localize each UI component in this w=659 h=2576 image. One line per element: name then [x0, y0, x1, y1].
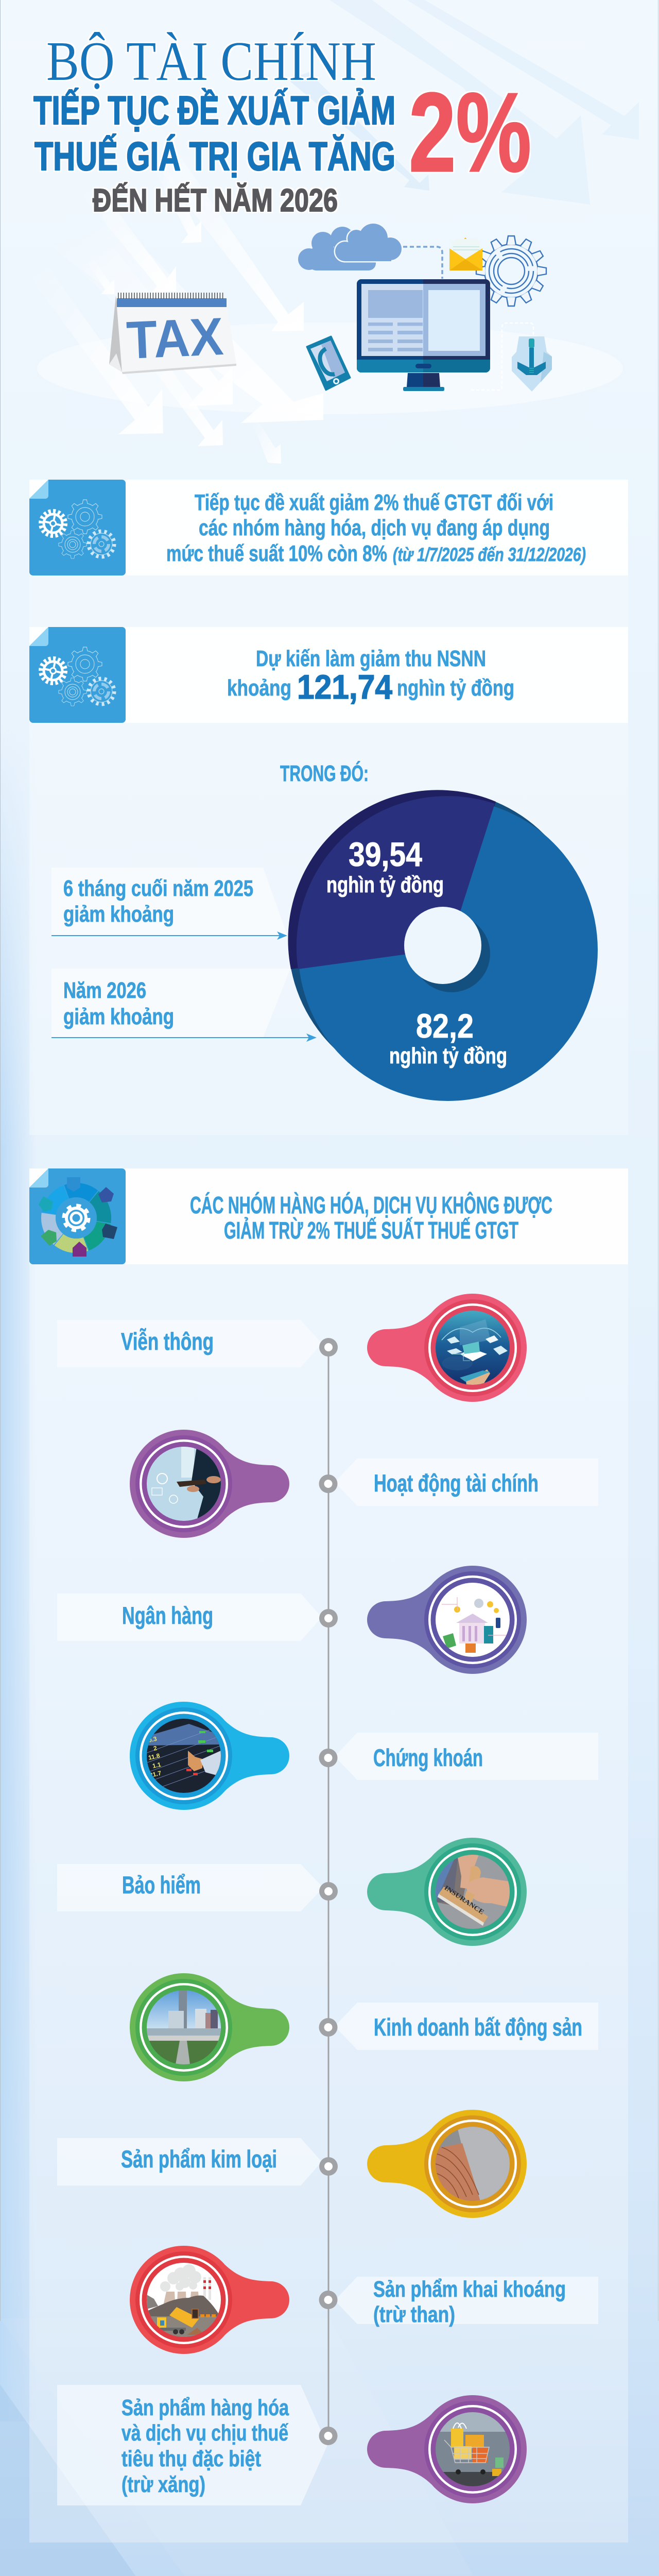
- pin: finance: [130, 1430, 289, 1538]
- item: Sản phẩm hàng hóa và dịch vụ chịu thuế tiêu thụ đặc biệt: Sản phẩm hàng hóa: [122, 2395, 289, 2420]
- title line: đến hết năm 2026: ĐẾN HẾT NĂM 2026: [93, 183, 338, 218]
- text: proposal: mức thuế suất 10% còn 8%: [166, 541, 387, 566]
- value: 82,2: nghìn tỷ đồng: [389, 1043, 507, 1069]
- item: Viễn thông: Viễn thông: [121, 1328, 214, 1355]
- item: Chứng khoán: [130, 1702, 598, 1810]
- text: proposal: Tiếp tục đề xuất giảm 2% thuế GTGT đối với: [195, 490, 553, 515]
- item: Kinh doanh bất động sản: Kinh doanh bất động sản: [374, 2013, 582, 2041]
- donut chart: [288, 790, 598, 1101]
- icon: monitor: [357, 279, 490, 391]
- label: 6 tháng cuối năm 2025: [51, 868, 287, 940]
- icon: mouse: [471, 323, 552, 392]
- pin: metals: [367, 2110, 527, 2218]
- panel: revenue estimate: [29, 627, 628, 723]
- icon: service wheel: [29, 1168, 126, 1264]
- item: Bảo hiểm: [57, 1838, 527, 1946]
- value: 39,54: [326, 835, 444, 897]
- pin: mining: [130, 2246, 289, 2354]
- connector: dashed line: [403, 247, 442, 279]
- icon: gear: [476, 236, 546, 306]
- pin: insurance: [367, 1838, 527, 1946]
- pin: telecom: [367, 1294, 527, 1402]
- pin: securities: 1.1: [152, 1761, 162, 1770]
- item: Hoạt động tài chính: Hoạt động tài chính: [374, 1469, 539, 1497]
- heading text: GIẢM TRỪ 2% THUẾ SUẤT THUẾ GTGT: [224, 1217, 518, 1244]
- item: Kinh doanh bất động sản: [130, 1973, 598, 2081]
- label: 6 tháng cuối năm 2025: 6 tháng cuối năm 2025: [63, 876, 253, 901]
- pin: banking: [367, 1566, 527, 1674]
- text: proposal: [166, 490, 586, 566]
- illustration: tax calendar: [109, 296, 236, 374]
- icon: clouds: [298, 224, 402, 270]
- icon: phone: [307, 336, 350, 390]
- panel: estimate background: [29, 575, 628, 1135]
- text: revenue estimate: nghìn tỷ đồng: [397, 675, 514, 701]
- text: proposal: các nhóm hàng hóa, dịch vụ đang áp dụng: [199, 515, 550, 540]
- heading: trong đó: TRONG ĐÓ:: [280, 760, 369, 786]
- illustration: technology devices: [298, 224, 552, 392]
- pin: securities: [130, 1702, 289, 1810]
- item: Sản phẩm hàng hóa và dịch vụ chịu thuế tiêu thụ đặc biệt: [57, 2385, 527, 2505]
- title line: Bộ Tài chính: BỘ TÀI CHÍNH: [46, 31, 376, 92]
- heading text: [190, 1192, 552, 1244]
- item: Sản phẩm kim loại: [57, 2110, 527, 2218]
- item: Viễn thông: [57, 1294, 527, 1402]
- item: Sản phẩm khai khoáng: (trừ than): [373, 2302, 455, 2327]
- timeline line: [327, 1347, 330, 2436]
- value: 39,54: 39,54: [349, 835, 422, 873]
- item: Bảo hiểm: Bảo hiểm: [122, 1871, 201, 1899]
- item: Sản phẩm kim loại: Sản phẩm kim loại: [121, 2145, 277, 2173]
- pin: securities: 11.8: [148, 1752, 161, 1761]
- title: [33, 31, 531, 218]
- slice: 39,54: [297, 796, 495, 969]
- value: 39,54: nghìn tỷ đồng: [326, 872, 444, 897]
- icon: gears folder: [29, 480, 126, 575]
- value: 82,2: 82,2: [416, 1007, 474, 1045]
- text: revenue estimate: [227, 646, 514, 706]
- item: Sản phẩm khai khoáng: [130, 2246, 598, 2354]
- label: 6 tháng cuối năm 2025: giảm khoảng: [63, 902, 174, 927]
- item: Ngân hàng: [57, 1566, 527, 1674]
- item: Sản phẩm hàng hóa và dịch vụ chịu thuế tiêu thụ đặc biệt: tiêu thụ đặc biệt: [122, 2446, 261, 2471]
- item: Ngân hàng: Ngân hàng: [122, 1602, 213, 1629]
- pin: special goods: [367, 2395, 527, 2503]
- label: năm 2026: Năm 2026: [63, 978, 146, 1003]
- icon: envelope: [449, 238, 482, 270]
- pin: real estate: [130, 1973, 289, 2081]
- item: Sản phẩm khai khoáng: Sản phẩm khai khoáng: [373, 2277, 566, 2302]
- label: năm 2026: giảm khoảng: [63, 1004, 174, 1029]
- item: Sản phẩm hàng hóa và dịch vụ chịu thuế tiêu thụ đặc biệt: và dịch vụ chịu thuế: [122, 2420, 288, 2446]
- title line: tiếp tục đề xuất giảm: TIẾP TỤC ĐỀ XUẤT GIẢM: [33, 88, 395, 133]
- calendar label: TAX: TAX: [125, 307, 224, 370]
- text: proposal: (từ 1/7/2025 đến 31/12/2026): [393, 544, 586, 565]
- pin: insurance: INSURANCE: [443, 1884, 485, 1916]
- icon: gears folder: [29, 627, 126, 723]
- pin: securities: 2: [153, 1744, 158, 1752]
- pin: securities: 21.7: [149, 1769, 162, 1779]
- panel: excluded groups background: [29, 1264, 628, 2543]
- panel: proposal: [29, 480, 628, 575]
- title highlight: 2%: 2%: [409, 70, 531, 195]
- label: năm 2026: [51, 969, 317, 1042]
- value: 82,2: [389, 1007, 507, 1069]
- item: Sản phẩm hàng hóa và dịch vụ chịu thuế tiêu thụ đặc biệt: (trừ xăng): [122, 2472, 205, 2497]
- title line: thuế giá trị gia tăng: THUẾ GIÁ TRỊ GIA TĂNG: [34, 133, 395, 179]
- text: revenue estimate: Dự kiến làm giảm thu NSNN: [256, 646, 486, 671]
- pin: securities: 0.3: [148, 1735, 158, 1744]
- text: revenue estimate: khoảng: [227, 675, 291, 701]
- item: Chứng khoán: Chứng khoán: [373, 1744, 483, 1771]
- item: Hoạt động tài chính: [130, 1430, 598, 1538]
- panel: excluded groups heading: [29, 1168, 628, 1264]
- text: revenue estimate: 121,74: [297, 668, 392, 706]
